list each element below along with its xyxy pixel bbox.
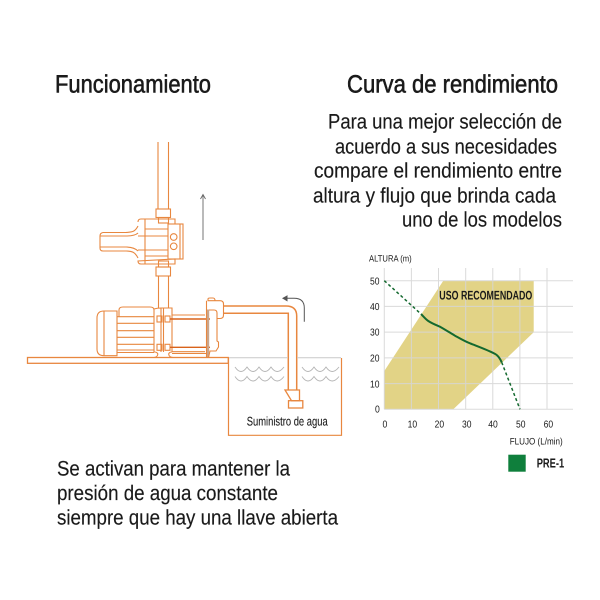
pressure switch bbox=[100, 209, 183, 276]
arrow: upward flow bbox=[200, 194, 206, 240]
text block: selection advice: acuerdo a sus necesidades bbox=[335, 135, 557, 158]
water surface bbox=[229, 357, 341, 359]
suction pipe bbox=[224, 306, 297, 390]
x axis labels: 0 bbox=[382, 419, 388, 430]
x axis labels: 50 bbox=[516, 419, 526, 430]
heading: Curva de rendimiento: Curva de rendimiento bbox=[347, 71, 558, 99]
arrow: suction flow bbox=[283, 296, 304, 322]
text block: operation description bbox=[57, 458, 338, 529]
y axis labels: 10 bbox=[370, 379, 380, 390]
water tank bbox=[228, 358, 342, 435]
pump housing bbox=[170, 298, 224, 358]
y axis labels bbox=[370, 276, 380, 416]
base platform bbox=[28, 358, 228, 363]
grid lines bbox=[384, 268, 573, 409]
legend: PRE-1 bbox=[508, 455, 564, 472]
heading: Funcionamiento: Funcionamiento bbox=[55, 71, 211, 99]
text block: selection advice: uno de los modelos bbox=[402, 209, 562, 232]
x axis labels: 40 bbox=[488, 419, 498, 430]
discharge pipe bbox=[158, 142, 168, 209]
text block: selection advice bbox=[313, 110, 562, 232]
x axis labels: 30 bbox=[462, 419, 472, 430]
x axis labels: 20 bbox=[435, 419, 444, 430]
text block: operation description: presión de agua constante bbox=[57, 482, 278, 505]
water waves bbox=[235, 367, 339, 381]
y axis labels: 30 bbox=[370, 328, 380, 339]
x axis labels: 60 bbox=[544, 419, 553, 430]
text block: selection advice: Para una mejor selección de bbox=[328, 110, 562, 133]
y axis labels: 50 bbox=[370, 276, 380, 287]
x axis title: FLUJO (L/min) bbox=[510, 436, 563, 447]
y axis labels: 40 bbox=[370, 302, 380, 313]
legend: PRE-1: PRE-1 bbox=[537, 456, 564, 471]
x axis labels: 10 bbox=[408, 419, 417, 430]
y axis labels: 20 bbox=[370, 354, 380, 365]
y axis labels: 0 bbox=[375, 405, 380, 416]
recommended use area bbox=[384, 281, 534, 409]
performance curve bbox=[384, 281, 520, 409]
x axis labels bbox=[382, 419, 553, 430]
area label: USO RECOMENDADO bbox=[439, 288, 532, 302]
text block: selection advice: altura y flujo que brinda cada bbox=[313, 184, 556, 207]
y axis title: ALTURA (m) bbox=[369, 253, 412, 263]
text block: selection advice: compare el rendimiento entre bbox=[314, 159, 562, 182]
foot valve bbox=[285, 390, 303, 408]
text block: operation description: siempre que hay una llave abierta bbox=[57, 506, 338, 529]
chart: performance curve bbox=[369, 253, 573, 447]
label: water supply: Suministro de agua bbox=[247, 415, 328, 429]
text block: operation description: Se activan para mantener la bbox=[57, 458, 290, 481]
diagram: pump installation bbox=[28, 142, 342, 435]
connecting pipe bbox=[158, 276, 168, 308]
motor bbox=[97, 307, 173, 358]
